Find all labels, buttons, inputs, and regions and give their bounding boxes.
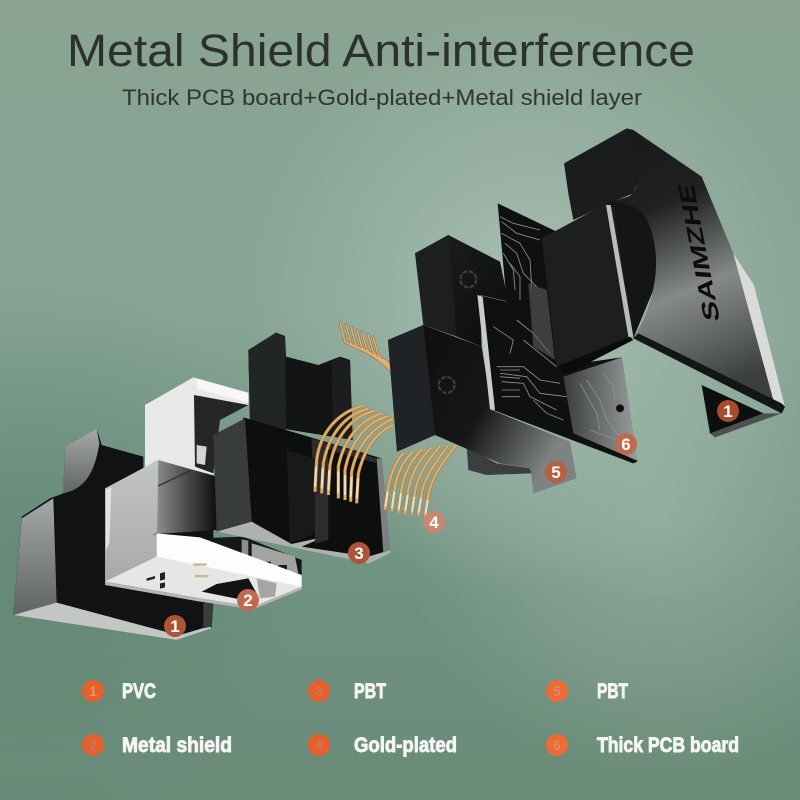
exploded connector: right half — [388, 128, 785, 493]
legend item 3: PBT — [308, 680, 386, 703]
part 6: thick PCB board — [478, 203, 637, 463]
part 5: PBT mid housing, front — [388, 271, 577, 493]
gold-plated pins, lower — [385, 445, 456, 517]
badge 4: 4 — [429, 513, 439, 532]
badge 3: 3 — [354, 544, 364, 563]
callout number badges on the product — [164, 400, 739, 637]
badge 5: 5 — [551, 463, 561, 482]
badge 2: 2 — [243, 591, 253, 610]
brand text: SAIMZHE — [673, 183, 725, 322]
part 1: left PVC shell — [13, 428, 213, 640]
badge 1 left — [164, 615, 186, 637]
legend item 5: PBT — [546, 680, 628, 703]
part 1: right PVC shell — [542, 128, 785, 437]
legend item 4: Gold-plated: 4 — [315, 737, 323, 753]
legend item 5: PBT: PBT — [597, 680, 628, 703]
part 3: PBT housing — [213, 417, 391, 563]
badge 1 left: 1 — [170, 617, 180, 636]
part 5: PBT mid housing, back — [415, 235, 532, 475]
legend item 2: Metal shield: 2 — [89, 737, 97, 753]
legend item 6: Thick PCB board — [546, 734, 739, 757]
legend item 5: PBT: 5 — [553, 683, 561, 699]
legend item 4: Gold-plated: Gold-plated — [354, 734, 457, 757]
badge 5 — [545, 461, 567, 483]
gold-plated pins, middle — [315, 406, 393, 503]
badge 1 right: 1 — [723, 402, 733, 421]
legend item 1: PVC: 1 — [89, 683, 97, 699]
legend item 2: Metal shield: Metal shield — [122, 734, 232, 757]
legend item 4: Gold-plated — [308, 734, 457, 757]
badge 3 — [348, 542, 370, 564]
legend item 1: PVC — [82, 680, 156, 703]
badge 1 right — [717, 400, 739, 422]
part 3 back housing — [248, 333, 353, 440]
legend — [82, 680, 739, 757]
badge 6 — [615, 433, 637, 455]
legend item 2: Metal shield — [82, 734, 232, 757]
legend item 6: Thick PCB board: 6 — [553, 737, 561, 753]
legend item 3: PBT: 3 — [315, 683, 323, 699]
upper gold pins — [340, 322, 390, 370]
legend item 3: PBT: PBT — [354, 680, 386, 703]
legend item 6: Thick PCB board: Thick PCB board — [597, 734, 739, 757]
subtitle: Thick PCB board+Gold-plated+Metal shield layer — [122, 85, 642, 110]
badge 4 — [423, 511, 445, 533]
legend item 1: PVC: PVC — [122, 680, 156, 703]
title: Metal Shield Anti-interference — [67, 25, 695, 76]
badge 2 — [237, 589, 259, 611]
part 2: metal shield — [105, 377, 302, 609]
badge 6: 6 — [621, 435, 631, 454]
exploded connector: left half — [13, 333, 456, 640]
